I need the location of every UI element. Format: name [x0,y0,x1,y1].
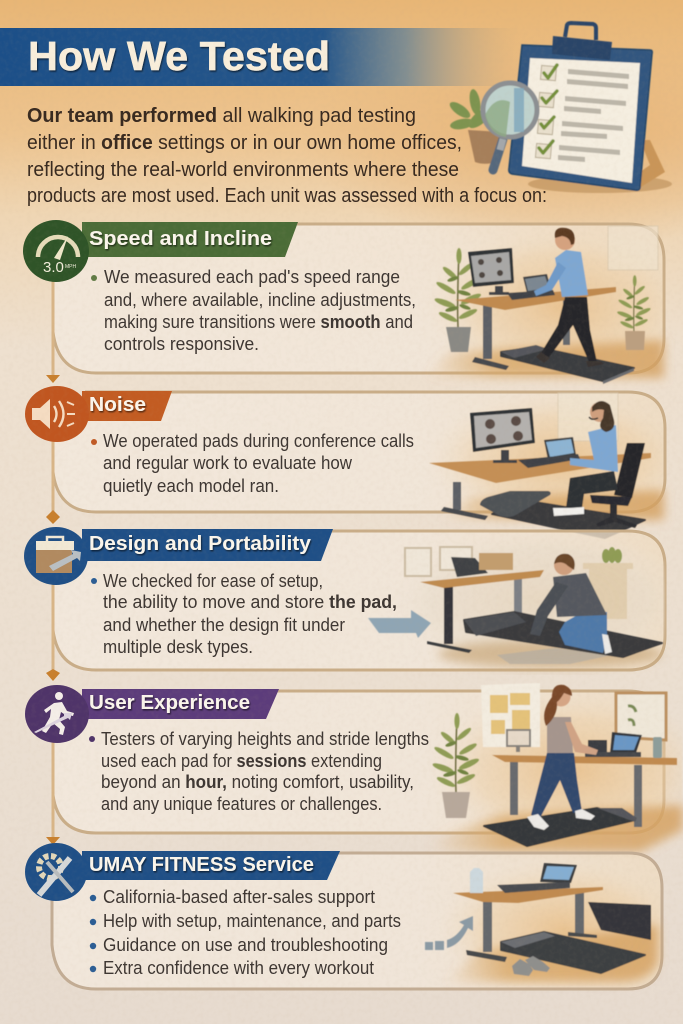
bullet text [91,431,414,496]
bullet list [90,887,401,978]
bullet list: Help with setup, maintenance, and parts [103,911,401,931]
title: How We Tested [28,33,330,79]
bullet text: Testers of varying heights and stride lengths [101,729,429,749]
bullet text: multiple desk types. [103,637,253,657]
illustration: walking with a laptop [420,683,683,852]
icon: briefcase [24,527,88,585]
bullet text: used each pad for sessions extending [101,751,382,771]
bullet text: quietly each model ran. [103,476,279,496]
bullet text [91,571,397,657]
panel: noise [25,386,665,538]
panel outline [53,531,665,670]
bullet text: controls responsive. [104,334,259,354]
arrow [368,610,431,638]
bullet text: and, where available, incline adjustments, [104,290,416,310]
bullet list: Guidance on use and troubleshooting [103,935,388,955]
icon: speedometer: 3.0 [43,259,64,276]
arrow [425,916,473,950]
section banner [82,529,333,561]
bullet text [89,729,429,814]
section banner [82,689,279,719]
intro paragraph [27,105,547,207]
section banner [82,391,172,421]
panel outline [53,224,664,373]
bullet text: and whether the design fit under [103,615,345,635]
icon: speedometer [23,220,89,282]
icon: walker with arrow [25,685,89,743]
panel: design and portability [24,527,665,681]
icon: speaker [25,386,89,442]
heading: UMAY FITNESS Service [89,853,314,876]
connector arrow [46,275,60,383]
intro paragraph: Our team performed all walking pad testing [27,105,416,127]
bullet text: and any unique features or challenges. [101,794,382,814]
bullet text: making sure transitions were smooth and [104,312,413,332]
bullet list: California-based after-sales support [103,887,375,907]
icon: speedometer: MPH [65,264,76,270]
bullet text: We measured each pad's speed range [104,267,400,287]
heading: User Experience [89,691,250,714]
icon: gear and tools [25,843,87,901]
bullet text: and regular work to evaluate how [103,453,353,473]
section banner [82,851,340,880]
bullet list: Extra confidence with every workout [103,958,374,978]
panel outline [53,691,664,833]
connector arrow [46,740,60,845]
intro paragraph: reflecting the real-world environments where these [27,159,459,181]
illustration: working at desk during a call [420,393,664,538]
heading: Design and Portability [89,532,312,555]
intro paragraph: products are most used. Each unit was assessed with a focus on: [27,185,547,207]
illustration: walking at standing desk [420,226,664,384]
heading: Speed and Incline [89,227,272,250]
panel: speed and incline [23,220,664,384]
panel: user experience [25,683,683,852]
panel: umay fitness service [25,843,662,989]
connector arrow [46,440,60,524]
illustration: desk with folded pad [425,860,660,986]
panel outline [53,392,665,512]
bullet text: We checked for ease of setup, [103,571,323,591]
bullet text: the ability to move and store the pad, [103,592,397,612]
illustration: moving the pad under a desk [368,534,665,668]
bullet text: We operated pads during conference calls [103,431,414,451]
heading: Noise [89,393,146,416]
icon: clipboard with magnifier and plant [447,23,672,193]
connector arrow [46,580,60,681]
section banner [82,222,298,257]
bullet text: beyond an hour, noting comfort, usability, [101,772,414,792]
intro paragraph: either in office settings or in our own home offices, [27,132,462,154]
panel outline [52,853,662,989]
bullet text [91,267,416,354]
title banner [0,28,520,86]
